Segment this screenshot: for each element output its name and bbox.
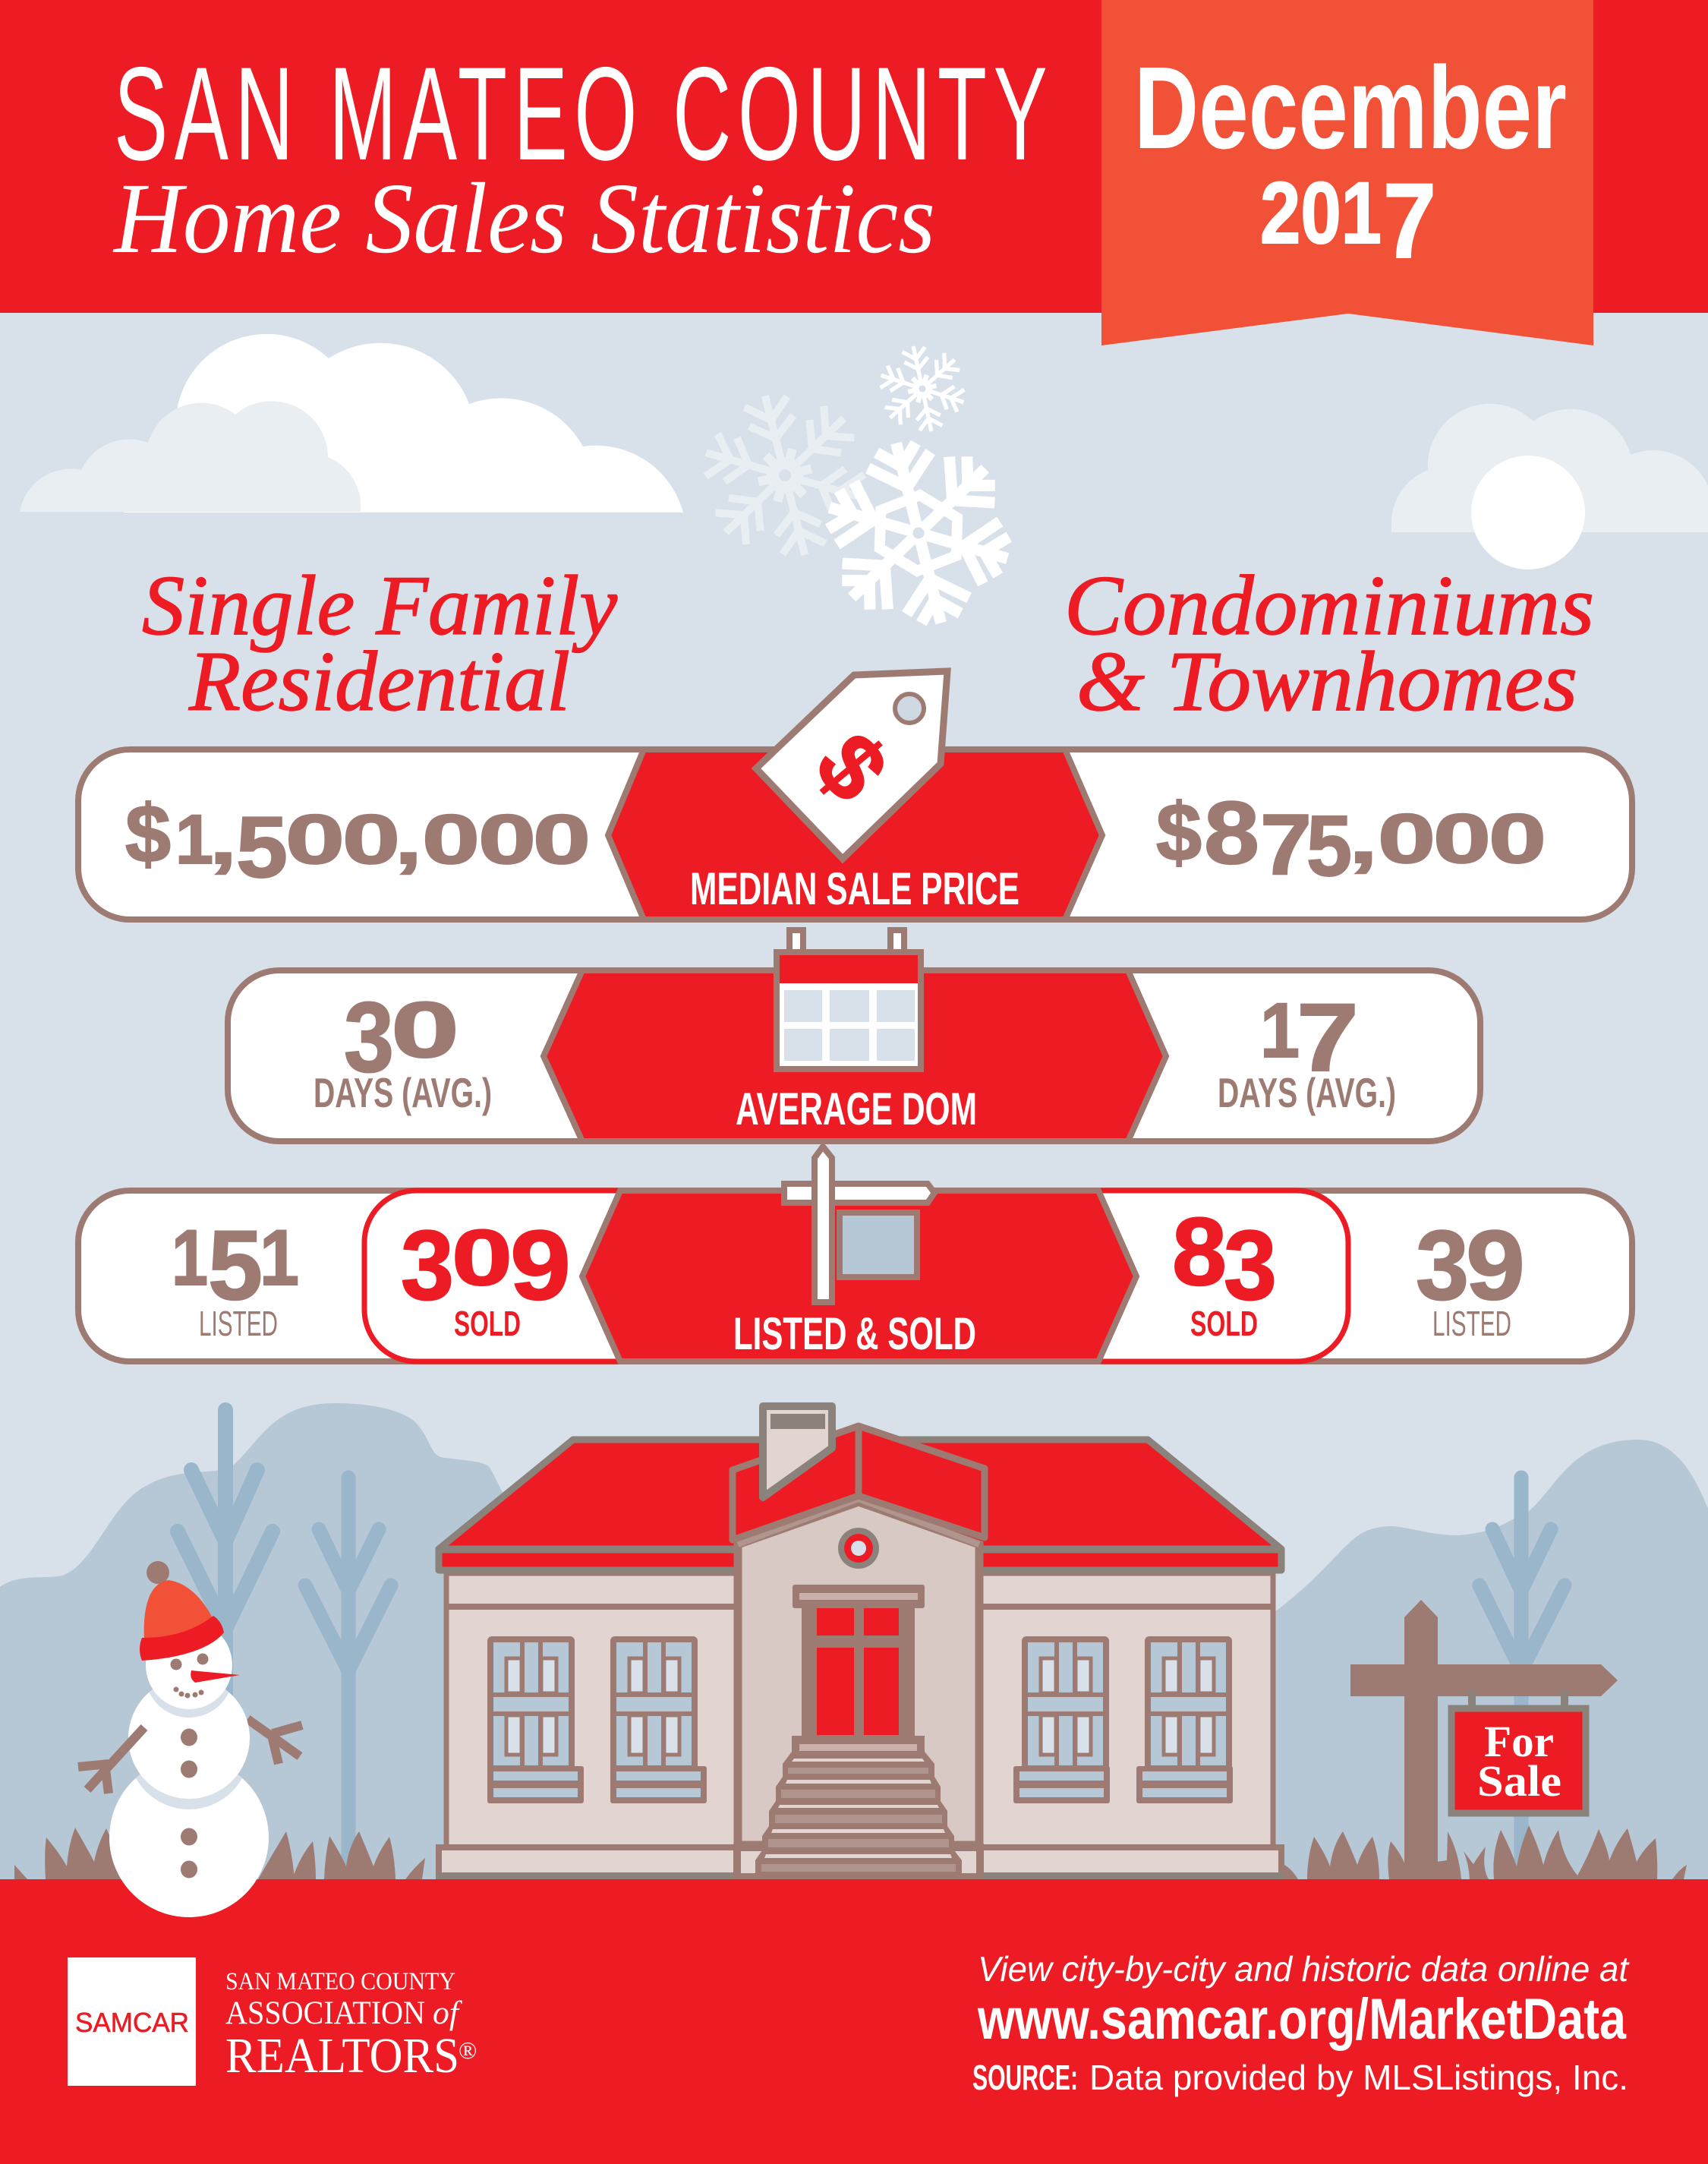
value: 17: 1 bbox=[1260, 987, 1300, 1074]
value: 151 listed bbox=[172, 1210, 299, 1343]
bottom shadow bbox=[136, 1774, 242, 1809]
pompom bbox=[147, 1561, 169, 1584]
mountains: left bbox=[0, 1403, 531, 1879]
center banner bbox=[582, 1191, 1136, 1361]
heading: condominiums: & Townhomes bbox=[1076, 635, 1577, 729]
value: single family price: 0 bbox=[342, 801, 400, 879]
chimney bbox=[763, 1406, 832, 1497]
board bbox=[1451, 1708, 1586, 1813]
fascia bbox=[439, 1550, 1281, 1570]
buttons bbox=[181, 1728, 197, 1879]
heading: single family bbox=[142, 559, 617, 729]
center base bbox=[733, 1844, 984, 1879]
board text bbox=[1477, 1717, 1561, 1806]
hat band bbox=[140, 1616, 224, 1661]
center block bbox=[738, 1502, 979, 1845]
value: condo price: 7 bbox=[1260, 797, 1312, 892]
bottom ball bbox=[109, 1758, 269, 1917]
ribbon month: December bbox=[1134, 43, 1567, 173]
value: single family price: 5 bbox=[236, 800, 288, 896]
caption: days: DAYS (AVG.) bbox=[314, 1069, 492, 1116]
snowflake: medium bbox=[685, 376, 884, 575]
heading: condominiums bbox=[1064, 559, 1594, 729]
left arm bbox=[78, 1727, 144, 1793]
round window bbox=[838, 1528, 879, 1569]
row: listed and sold bbox=[78, 1191, 1632, 1361]
board text: Sale bbox=[1477, 1756, 1561, 1806]
tree: left bbox=[178, 1410, 273, 1746]
value: 39 listed bbox=[1416, 1210, 1525, 1343]
sun bbox=[1471, 456, 1585, 569]
nose bbox=[191, 1670, 240, 1683]
value: 151 listed: LISTED bbox=[199, 1304, 278, 1343]
value: 151 listed: 5 bbox=[208, 1210, 263, 1320]
icon: price tag bbox=[756, 671, 947, 859]
title: SAN MATEO COUNTY bbox=[114, 39, 1048, 188]
value: 30: 3 bbox=[344, 981, 394, 1093]
association name: SAN MATEO COUNTY bbox=[225, 1968, 455, 1995]
value: 17 bbox=[1260, 983, 1359, 1091]
caption: days: DAYS (AVG.) bbox=[1218, 1069, 1396, 1116]
tree: middle bbox=[305, 1478, 391, 1875]
association name: ASSOCIATION bbox=[225, 1995, 425, 2031]
value: condo price bbox=[1156, 783, 1546, 894]
value: 309 sold: 3 bbox=[401, 1210, 454, 1320]
gable roof bbox=[733, 1426, 985, 1540]
value: 30 bbox=[344, 981, 459, 1093]
window: right outer bbox=[1136, 1639, 1233, 1803]
row: median sale price bbox=[78, 749, 1632, 920]
hat bbox=[144, 1580, 214, 1644]
wall band bbox=[446, 1604, 1273, 1610]
cloud: large left bbox=[20, 334, 683, 513]
association name: of bbox=[433, 1995, 462, 2031]
value: 83 sold: 8 bbox=[1172, 1197, 1227, 1305]
value: condo price: 0 bbox=[1489, 800, 1546, 878]
value: single family price: , bbox=[210, 801, 237, 879]
value: single family price: 0 bbox=[478, 801, 536, 879]
value: 39 listed: 3 bbox=[1416, 1210, 1469, 1320]
hooks bbox=[1468, 1689, 1568, 1708]
sold pill bbox=[364, 1191, 1348, 1361]
door bbox=[793, 1585, 925, 1739]
value: single family price bbox=[125, 787, 591, 896]
board text: For bbox=[1484, 1717, 1554, 1766]
heading: single family: Single Family bbox=[142, 559, 617, 653]
value: single family price: 0 bbox=[285, 801, 345, 879]
middle ball bbox=[128, 1677, 250, 1799]
label: MEDIAN SALE PRICE bbox=[690, 863, 1019, 914]
row: average dom bbox=[228, 970, 1480, 1141]
logo: samcar: SAMCAR bbox=[75, 2007, 189, 2038]
subtitle: Home Sales Statistics bbox=[112, 162, 935, 274]
logo: samcar bbox=[68, 1957, 196, 2086]
tree: right bbox=[1480, 1478, 1565, 1875]
value: single family price: 0 bbox=[533, 801, 591, 879]
grass: right bbox=[1284, 1825, 1687, 1879]
value: 309 sold: 0 bbox=[452, 1214, 512, 1302]
ribbon year bbox=[1260, 161, 1436, 280]
footer source: SOURCE: bbox=[972, 2058, 1078, 2097]
heading: single family: Residential bbox=[188, 635, 570, 729]
value: 39 listed: 9 bbox=[1466, 1210, 1525, 1320]
footer call to action: View city-by-city and historic data online at bbox=[978, 1949, 1630, 1989]
for sale sign bbox=[1350, 1600, 1618, 1879]
gable band bbox=[738, 1499, 979, 1544]
value: single family price: , bbox=[395, 801, 422, 879]
value: 83 sold: 3 bbox=[1224, 1210, 1277, 1320]
icon: calendar bbox=[777, 930, 921, 1069]
value: single family price: $ bbox=[125, 787, 171, 879]
value: 17: 7 bbox=[1297, 983, 1359, 1091]
value: 309 sold: 9 bbox=[510, 1210, 571, 1320]
ribbon year: 7 bbox=[1383, 161, 1436, 280]
label: AVERAGE DOM bbox=[736, 1084, 977, 1134]
outer pill bbox=[78, 1191, 1632, 1361]
mountains: right bbox=[1215, 1440, 1708, 1879]
value: condo price: 0 bbox=[1378, 800, 1435, 878]
ribbon year: 201 bbox=[1260, 165, 1382, 262]
right arm bbox=[247, 1719, 302, 1764]
value: 309 sold: SOLD bbox=[454, 1304, 521, 1343]
value: condo price: 0 bbox=[1433, 800, 1491, 878]
value: 30: 0 bbox=[391, 986, 459, 1074]
head bbox=[146, 1621, 232, 1709]
value: single family price: 0 bbox=[422, 801, 480, 879]
value: 151 listed: 1 bbox=[172, 1214, 208, 1302]
base bbox=[436, 1847, 1284, 1879]
date ribbon bbox=[1101, 0, 1593, 345]
association name: REALTORS bbox=[225, 2028, 459, 2084]
cloud: front left bbox=[20, 401, 361, 512]
icon: sign post bbox=[784, 1147, 934, 1302]
snowflake: small bbox=[871, 337, 974, 440]
pill bbox=[228, 970, 1480, 1141]
value: 39 listed: LISTED bbox=[1432, 1304, 1511, 1343]
window: left outer bbox=[487, 1639, 584, 1803]
cloud and sun: right bbox=[1391, 404, 1708, 569]
label: LISTED & SOLD bbox=[733, 1308, 976, 1359]
main roof bbox=[439, 1440, 1281, 1549]
value: single family price: 1 bbox=[175, 801, 213, 879]
wing walls bbox=[446, 1573, 1273, 1848]
middle shadow bbox=[149, 1689, 229, 1718]
window: right inner bbox=[1013, 1639, 1110, 1803]
pill bbox=[78, 749, 1632, 920]
value: condo price: 8 bbox=[1204, 783, 1259, 882]
value: condo price: $ bbox=[1156, 786, 1202, 878]
heading: condominiums: Condominiums bbox=[1064, 559, 1594, 653]
footer band bbox=[0, 1879, 1708, 2164]
eyes bbox=[170, 1654, 208, 1670]
value: 83 sold: SOLD bbox=[1190, 1304, 1258, 1343]
house bbox=[436, 1406, 1284, 1879]
value: 151 listed: 1 bbox=[260, 1214, 299, 1302]
snowflake: large bbox=[802, 420, 1035, 646]
smile bbox=[173, 1687, 203, 1698]
value: 83 sold bbox=[1172, 1197, 1277, 1343]
association name: ® bbox=[459, 2036, 477, 2064]
stairs bbox=[755, 1736, 962, 1879]
grass: left bbox=[14, 1828, 425, 1879]
arm bbox=[1350, 1664, 1618, 1696]
icon: price tag: $ bbox=[796, 714, 908, 820]
association name bbox=[225, 1968, 477, 2084]
center banner bbox=[608, 749, 1102, 920]
snowman bbox=[78, 1561, 302, 1917]
post bbox=[1404, 1600, 1438, 1879]
center banner bbox=[544, 970, 1166, 1141]
value: condo price: , bbox=[1349, 800, 1378, 878]
footer source: Data provided by MLSListings, Inc. bbox=[1089, 2058, 1628, 2097]
header band bbox=[0, 0, 1708, 313]
window: left inner bbox=[610, 1639, 707, 1803]
value: condo price: 5 bbox=[1306, 798, 1352, 894]
value: 309 sold bbox=[401, 1210, 571, 1343]
